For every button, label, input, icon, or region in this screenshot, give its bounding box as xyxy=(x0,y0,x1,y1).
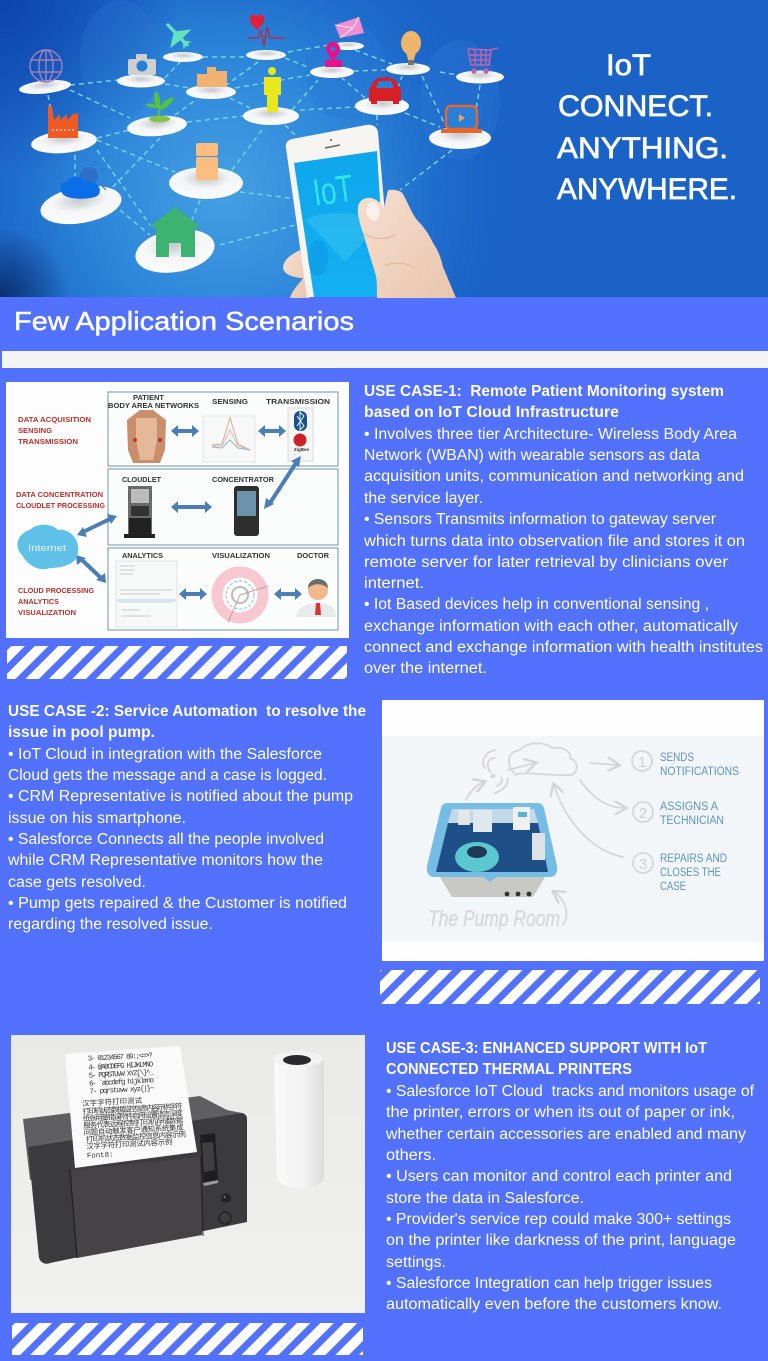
printed receipt: 6- `abcdefg hijklmno xyxy=(89,1077,154,1089)
black stage headings: CLOUDLET xyxy=(122,475,161,484)
red stage labels: CLOUD PROCESSING xyxy=(18,586,94,595)
printed receipt: 打印机状态数据监控信息内容示例字符 xyxy=(82,1102,183,1117)
use case 2 text: while CRM Representative monitors how the xyxy=(7,852,323,869)
use case 1 text: based on IoT Cloud Infrastructure xyxy=(364,404,619,421)
use case 3 text: • Provider's service rep could make 300+ settings xyxy=(386,1211,731,1228)
use case 3 text: store the data in Salesforce. xyxy=(386,1190,584,1207)
step labels: CASE xyxy=(660,879,686,893)
black stage headings: CONCENTRATOR xyxy=(212,475,275,484)
cloud sketch and arrows xyxy=(466,743,653,925)
white platforms xyxy=(18,42,504,279)
chart: circular visualization xyxy=(217,572,268,622)
red stage labels: VISUALIZATION xyxy=(18,608,76,617)
icon: laptop xyxy=(441,106,482,133)
use case 3 text: CONNECTED THERMAL PRINTERS xyxy=(386,1061,632,1078)
step labels: SENDS xyxy=(660,750,694,764)
printed receipt: 5- PQRSTUVW XYZ[\]^_ xyxy=(88,1068,154,1081)
icon: light bulb xyxy=(401,31,421,65)
step numbers xyxy=(638,754,647,873)
printed receipt: 汉字字符打印测试 xyxy=(82,1096,143,1109)
black stage headings: VISUALIZATION xyxy=(212,551,270,560)
use case 1 text xyxy=(363,383,763,677)
step labels: ASSIGNS A xyxy=(660,799,719,813)
icon: printer xyxy=(23,1096,247,1264)
use case 2 text: issue in pool pump. xyxy=(8,724,155,741)
icon: smartphone: IoT xyxy=(310,168,356,215)
red stage labels xyxy=(16,415,105,617)
use case 3 text: automatically even before the customers know. xyxy=(386,1296,722,1313)
headline xyxy=(557,49,737,206)
red stage labels: DATA CONCENTRATION xyxy=(16,490,103,499)
step numbers: 1 xyxy=(638,754,646,771)
printed receipt xyxy=(65,1046,197,1168)
black stage headings: ANALYTICS xyxy=(122,551,163,560)
printed receipt: Font8: xyxy=(87,1151,114,1161)
light divider bar xyxy=(2,351,768,368)
step labels: CLOSES THE xyxy=(660,865,721,879)
chart: sensing signal xyxy=(203,416,255,462)
black stage headings: DOCTOR xyxy=(297,551,330,560)
icon: globe xyxy=(30,50,62,82)
stripe band 3 xyxy=(12,1323,363,1355)
icon: location pin xyxy=(325,42,342,67)
stripe band 2 xyxy=(380,970,760,1004)
panel: patient monitoring diagram xyxy=(6,382,349,638)
use case 1 text: exchange information with each other, automatically xyxy=(364,618,738,635)
use case 2 text: • IoT Cloud in integration with the Salesforce xyxy=(8,746,322,763)
printed receipt: 问题自动触发客户通知系统集成 xyxy=(83,1123,184,1138)
red stage labels: DATA ACQUISITION xyxy=(18,415,91,424)
printed receipt: 打印机状态数据监控信息内容示例 xyxy=(86,1130,186,1145)
icon: paper roll xyxy=(273,1051,324,1188)
use case 2 text: case gets resolved. xyxy=(8,874,146,891)
use case 3 text: on the printer like darkness of the print, language xyxy=(386,1232,736,1249)
step labels xyxy=(660,750,739,893)
use case 3 text: settings. xyxy=(386,1254,446,1271)
icon: internet cloud xyxy=(17,525,78,569)
step numbers: 2 xyxy=(639,805,647,822)
panel: pool pump diagram xyxy=(382,700,764,961)
red stage labels: ANALYTICS xyxy=(18,597,59,606)
stripe band 1 xyxy=(7,646,347,679)
headline: ANYWHERE. xyxy=(557,173,737,206)
blue double arrows xyxy=(76,425,302,600)
use case 2 text: • Pump gets repaired & the Customer is notified xyxy=(8,895,347,912)
use case 3 text: USE CASE-3: ENHANCED SUPPORT WITH IoT xyxy=(386,1040,708,1057)
icon: concentrator phone xyxy=(234,486,259,536)
icon: analytics report xyxy=(116,561,177,627)
step labels: TECHNICIAN xyxy=(660,813,724,827)
icon: weather cloud xyxy=(60,161,106,199)
icon: pump box xyxy=(427,803,557,897)
use case 2 text: • CRM Representative is notified about the pump xyxy=(8,788,353,805)
use case 1 text: Network (WBAN) with wearable sensors as data xyxy=(364,447,700,464)
icon: city buildings xyxy=(197,67,227,87)
use case 1 text: USE CASE-1: Remote Patient Monitoring system xyxy=(364,383,724,400)
use case 1 text: • Iot Based devices help in conventional sensing , xyxy=(364,596,709,613)
black stage headings: BODY AREA NETWORKS xyxy=(108,401,199,410)
icon: fridge xyxy=(196,143,218,180)
step numbers: 3 xyxy=(639,856,647,873)
use case 2 text: regarding the resolved issue. xyxy=(8,916,213,933)
use case 3 text: others. xyxy=(386,1147,436,1164)
use case 1 text: connect and exchange information with health institutes xyxy=(364,639,763,656)
icon: shopping cart xyxy=(468,48,498,73)
network connection lines xyxy=(48,44,480,245)
icon: factory xyxy=(48,106,78,138)
use case 3 text: whether certain accessories are enabled and many xyxy=(385,1126,746,1143)
headline: CONNECT. xyxy=(558,90,713,123)
icon: internet cloud: Internet xyxy=(28,543,66,554)
printed receipt: 服务代表远程控制打印机存储数据 xyxy=(83,1116,184,1131)
use case 1 text: acquisition units, communication and networking and xyxy=(364,468,744,485)
icon: plant xyxy=(145,91,174,122)
headline: IoT xyxy=(606,49,651,82)
use case 3 text: • Users can monitor and control each printer and xyxy=(386,1168,732,1185)
use case 1 text: which turns data into observation file and stores it on xyxy=(363,533,745,550)
use case 2 text: USE CASE -2: Service Automation to resolve the xyxy=(8,703,366,720)
hero banner xyxy=(0,0,768,298)
icon: camera xyxy=(128,54,156,75)
black stage headings: SENSING xyxy=(212,397,248,406)
black stage headings: PATIENT xyxy=(133,393,164,402)
use case 2 text xyxy=(7,703,366,933)
use case 1 text: remote server for later retrieval by clinicians over xyxy=(364,554,728,571)
icon: airplane xyxy=(168,25,190,48)
icon: bluetooth and zigbee card xyxy=(288,408,313,461)
use case 3 text xyxy=(385,1040,755,1313)
use case 3 text: • Salesforce IoT Cloud tracks and monitors usage of xyxy=(386,1083,755,1100)
use case 3 text: the printer, errors or when its out of paper or ink, xyxy=(386,1104,735,1121)
use case 2 text: issue on his smartphone. xyxy=(8,810,186,827)
red stage labels: SENSING xyxy=(18,426,52,435)
use case 1 text: the service layer. xyxy=(364,490,483,507)
use case 1 text: • Involves three tier Architecture- Wireless Body Area xyxy=(364,426,737,443)
use case 2 text: • Salesforce Connects all the people involved xyxy=(8,831,324,848)
use case 3 text: • Salesforce Integration can help trigger issues xyxy=(386,1275,712,1292)
use case 1 text: internet. xyxy=(364,575,424,592)
icon: bluetooth and zigbee card: ZigBee xyxy=(294,447,310,452)
black stage headings: TRANSMISSION xyxy=(266,397,330,406)
icon: car xyxy=(369,77,401,104)
use case 1 text: over the internet. xyxy=(364,660,487,677)
icon: doctor xyxy=(296,579,336,617)
use case 1 text: • Sensors Transmits information to gateway server xyxy=(364,511,716,528)
printed receipt: 3- 01234567 89:;<=>? xyxy=(88,1052,153,1064)
icon: envelope xyxy=(335,17,364,38)
black stage headings xyxy=(108,393,330,560)
icon: smartphone xyxy=(286,125,392,297)
section heading: Few Application Scenarios xyxy=(14,306,354,336)
panel: thermal printer photo xyxy=(11,1035,365,1313)
icon: cloudlet server xyxy=(124,486,155,538)
icon: heart and pulse xyxy=(248,14,285,46)
icon: patient torso xyxy=(127,410,166,463)
step labels: NOTIFICATIONS xyxy=(660,764,739,778)
printed receipt: 4- @ABCDEFG HIJKLMNO xyxy=(88,1061,154,1073)
use case 2 text: Cloud gets the message and a case is logged. xyxy=(8,767,327,784)
printed receipt: 汉字字符打印测试内容示例 xyxy=(86,1137,173,1152)
headline: ANYTHING. xyxy=(557,132,728,165)
icon: house xyxy=(149,207,201,257)
red stage labels: TRANSMISSION xyxy=(18,437,78,446)
step labels: REPAIRS AND xyxy=(660,851,727,865)
hand holding phone xyxy=(283,125,456,298)
pump room caption: The Pump Room xyxy=(428,906,560,931)
icon: person xyxy=(264,67,281,112)
printed receipt: 纸张用量错误附件启用设置语言深度 xyxy=(83,1109,184,1124)
red stage labels: CLOUDLET PROCESSING xyxy=(16,501,105,510)
printed receipt: 7- pqrstuvw xyz{|}~ xyxy=(89,1085,155,1097)
